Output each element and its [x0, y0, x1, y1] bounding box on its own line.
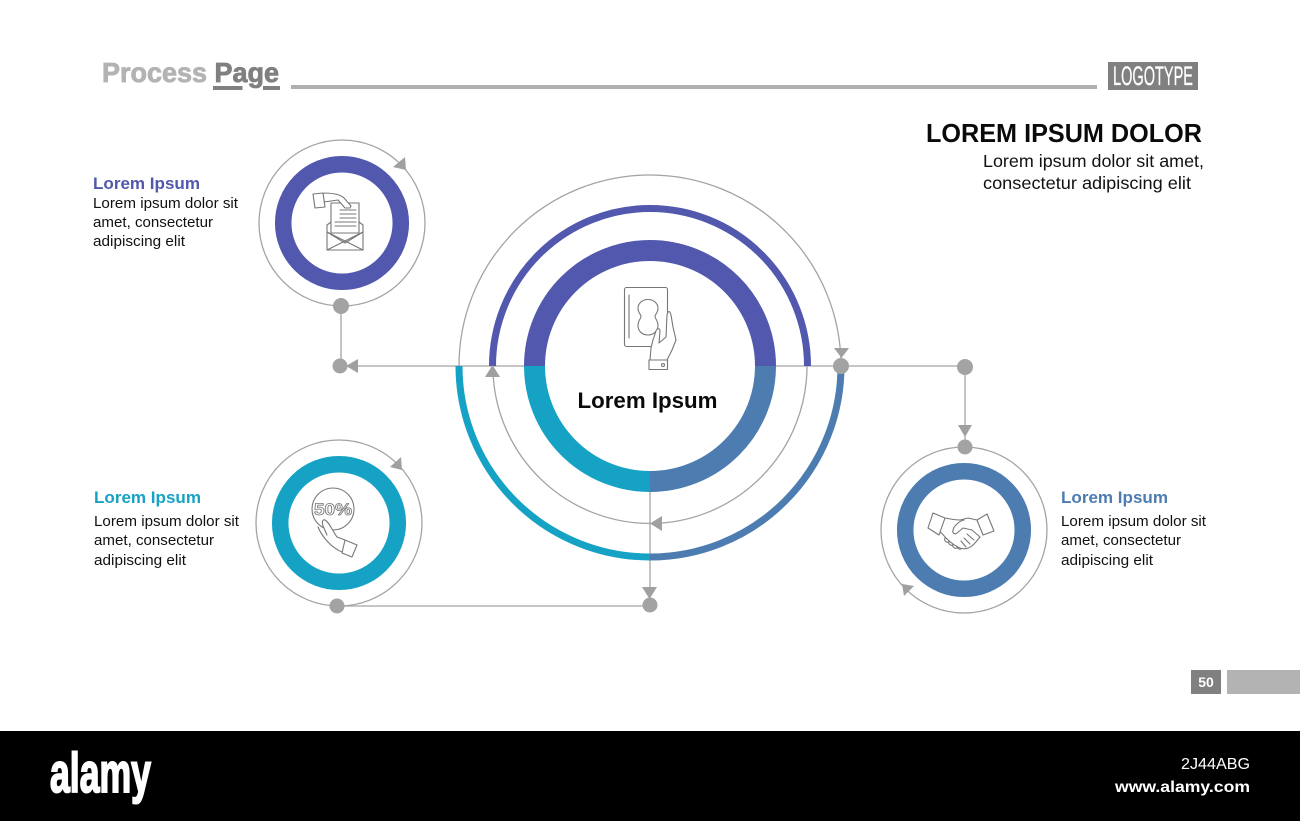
page number — [1191, 670, 1300, 694]
image id: 2J44ABG — [1181, 756, 1250, 773]
top right text block: Lorem ipsum dolor sit amet, — [983, 151, 1204, 171]
arrow — [902, 584, 914, 596]
central diagram — [459, 175, 841, 557]
logotype badge: LOGOTYPE — [1113, 61, 1193, 91]
blue ring — [905, 471, 1023, 589]
text: top left step: amet, consectetur — [93, 215, 213, 231]
teal outer arc — [459, 366, 650, 557]
text: lower left step: amet, consectetur — [94, 533, 214, 549]
text: top left step: adipiscing elit — [93, 234, 185, 250]
alamy logo: alamy — [50, 741, 151, 804]
header rule — [291, 85, 1097, 89]
arrowheads and connector nodes — [330, 298, 973, 614]
page number: 50 — [1198, 674, 1214, 690]
purple inner arc — [534, 250, 766, 366]
text: lower left step: adipiscing elit — [94, 553, 186, 569]
thin orbit — [881, 447, 1047, 613]
icon: handshake — [928, 513, 994, 549]
logotype badge — [1108, 61, 1198, 91]
top right text block: LOREM IPSUM DOLOR — [926, 118, 1202, 148]
title: Process Page: Process Page — [102, 57, 279, 88]
panel: right step — [881, 447, 1047, 613]
icon: hand with 50 percent ball — [312, 488, 357, 557]
outer thin top arc — [459, 175, 841, 366]
text: right step: amet, consectetur — [1061, 533, 1181, 549]
panel: top left step — [259, 140, 425, 306]
top right text block: consectetur adipiscing elit — [983, 173, 1191, 193]
panel: lower left step — [256, 440, 422, 606]
text: right step: Lorem ipsum dolor sit — [1061, 514, 1206, 530]
thin orbit — [259, 140, 425, 306]
text: top left step: Lorem Ipsum — [93, 174, 200, 193]
thin orbit — [256, 440, 422, 606]
text: right step: Lorem Ipsum — [1061, 488, 1168, 507]
teal inner arc — [534, 366, 650, 482]
arrow — [390, 457, 402, 470]
text: lower left step: Lorem ipsum dolor sit — [94, 514, 239, 530]
text: lower left step — [94, 488, 239, 569]
text: right step — [1061, 488, 1206, 569]
title underline — [213, 86, 280, 90]
arrow — [393, 157, 406, 170]
purple middle arc — [492, 209, 808, 366]
blue inner arc — [650, 366, 766, 482]
purple ring — [283, 164, 401, 282]
text: top left step: Lorem ipsum dolor sit — [93, 196, 238, 212]
icon: letter in envelope — [313, 193, 363, 250]
connector lines — [337, 306, 965, 606]
text: lower left step: Lorem Ipsum — [94, 488, 201, 507]
text: right step: adipiscing elit — [1061, 553, 1153, 569]
lower thin arc — [493, 366, 807, 524]
icon: hand with 50 percent ball: 50% — [314, 500, 352, 519]
website: www.alamy.com — [1114, 779, 1250, 796]
footer band — [0, 731, 1300, 821]
text: top left step — [93, 174, 238, 250]
page header — [102, 57, 1198, 91]
blue outer arc — [650, 366, 841, 557]
label: center: Lorem Ipsum — [578, 388, 718, 413]
icon: hand holding tablet — [624, 288, 676, 370]
teal ring — [280, 464, 398, 582]
top right text block — [926, 118, 1204, 193]
